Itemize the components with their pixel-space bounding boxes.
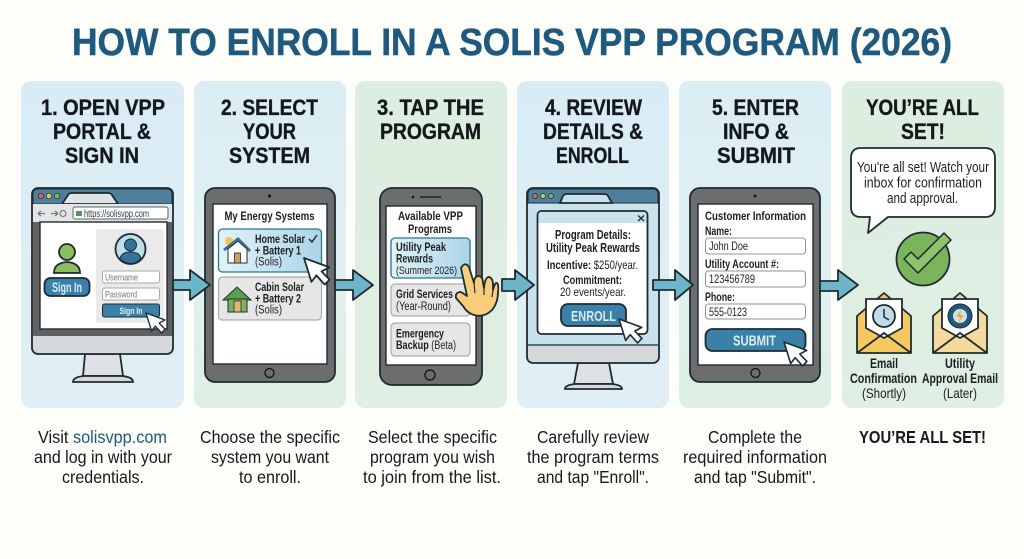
card: home solar: + Battery 1 [255,246,301,258]
button: submit [706,329,806,351]
heading: step 2: YOUR [243,119,296,144]
modal: program details: Incentive: $250/year. [547,258,638,272]
icon: phone with programs list: Available VPP [398,209,463,223]
panel: all set [842,81,1004,408]
heading: step 4: DETAILS & [543,119,643,144]
heading: step 3: PROGRAM [380,119,481,144]
panel: step 4 review [517,81,669,408]
label: utility approval email: (Later) [943,386,977,401]
card: grid services [391,284,470,316]
label: utility approval email [922,356,998,401]
icon: desktop monitor with login [32,188,173,382]
modal: program details: Commitment: [563,273,622,287]
card: home solar: Home Solar [255,234,305,246]
callout: watch your inbox: inbox for confirmation [864,176,982,192]
card: home solar [218,229,322,272]
heading: step 5 [712,95,799,168]
arrow: step 4 to 5 [653,270,693,300]
field: phone: 555-0123 [709,307,747,319]
card: utility peak rewards: (Summer 2026) [396,265,457,277]
icon: cursor [304,252,333,288]
caption: step 4: Carefully review [537,427,649,447]
card: utility peak rewards: Rewards [396,254,433,266]
callout: watch your inbox [851,148,995,233]
field: name: John Doe [709,241,748,253]
label: email confirmation: (Shortly) [862,386,906,401]
card: cabin solar: Cabin Solar [255,282,304,294]
card: emergency backup: Emergency [396,328,444,340]
card: home solar: (Solis) [255,256,282,268]
icon: tapping hand [456,264,498,316]
card: cabin solar [218,277,322,320]
button: submit sign in [102,304,160,317]
arrow: step 1 to 2 [173,270,210,300]
caption: step 5 [683,427,827,487]
caption: step 1: and log in with your [34,447,172,467]
icon: phone with programs list: Programs [408,222,452,236]
arrow: step 3 to 4 [502,270,534,300]
heading: step 1: PORTAL & [53,119,151,144]
icon: cursor [146,309,168,335]
icon: tablet with systems list [205,188,335,382]
icon: desktop monitor with login: https://solisvpp.com [84,208,149,220]
icon: email confirmation envelope [857,293,911,353]
icon: green user [54,244,80,273]
caption: step 2: system you want [211,447,329,467]
heading: step 3 [377,95,484,144]
title: HOW TO ENROLL IN A SOLIS VPP PROGRAM (2026) [72,22,952,64]
panel: step 2 select system [194,81,346,408]
icon: tablet with customer form [690,188,820,382]
callout: watch your inbox: You're all set! Watch your [857,160,989,176]
heading: step 2 [221,95,318,168]
card: utility peak rewards: Utility Peak [396,242,446,254]
heading: step 4: ENROLL [556,143,629,168]
card: emergency backup [391,323,470,356]
caption: step 5: Complete the [708,427,802,447]
field: phone [706,304,806,319]
label: utility approval email: Utility [945,356,975,371]
button: sign in [44,278,90,296]
button: submit: SUBMIT [733,334,776,350]
button: submit sign in: Sign In [120,306,142,316]
modal: program details [538,211,648,334]
caption: step 2 [200,427,340,487]
label: email confirmation: Email [870,356,898,371]
heading: step 4: 4. REVIEW [545,95,643,120]
caption: step 3 [363,427,501,487]
icon: phone with programs list [380,188,498,385]
heading: step 5: INFO & [723,119,789,144]
field: account [706,271,806,287]
icon: cursor [784,337,810,369]
card: grid services: Grid Services [396,289,453,301]
caption: step 4: and tap "Enroll". [537,467,649,487]
panel: step 1 open portal [21,81,184,408]
modal: program details: 20 events/year. [560,285,626,299]
card: cabin solar: + Battery 2 [255,294,301,306]
label: email confirmation: Confirmation [850,371,917,386]
field: password [102,288,160,300]
caption: step 4: the program terms [527,447,659,467]
icon: tablet with customer form: Customer Information [705,211,806,223]
icon: tablet with customer form: Phone: [705,292,735,304]
caption: step 5: and tap "Submit". [694,467,816,487]
heading: all set: SET! [901,119,945,144]
card: cabin solar: (Solis) [255,304,282,316]
heading: step 1: SIGN IN [65,143,139,168]
field: name [706,238,806,254]
heading: step 1 [41,95,165,168]
heading: step 3: 3. TAP THE [377,95,484,120]
caption: step 1: credentials. [62,467,144,487]
arrow: step 2 to 3 [335,270,373,300]
caption: step 4 [527,427,659,487]
field: username: Username [105,272,138,284]
card: grid services: (Year-Round) [396,301,451,313]
heading: all set [866,95,979,144]
field: password: Password [105,290,137,300]
heading: step 2: SYSTEM [229,143,310,168]
label: email confirmation [850,356,917,401]
icon: cursor [619,314,645,346]
callout: watch your inbox: and approval. [887,191,958,207]
card: emergency backup: Backup (Beta) [396,340,456,352]
panel: step 3 tap program [355,81,507,408]
arrow: step 5 to final [820,270,858,300]
caption: step 1: Visit solisvpp.com [38,427,167,447]
label: utility approval email: Approval Email [922,371,998,386]
caption: step 3: program you wish [370,447,495,467]
heading: step 1: 1. OPEN VPP [41,95,165,120]
caption: step 2: to enroll. [239,467,301,487]
icon: monitor with program details [527,188,659,389]
panel: step 5 enter info [679,81,831,408]
button: sign in: Sign In [52,279,82,295]
modal: program details: Utility Peak Rewards [546,241,640,255]
heading: step 5: SUBMIT [717,143,795,168]
caption: all set: YOU’RE ALL SET! [859,427,986,447]
button: enroll: ENROLL [571,308,616,325]
field: username [102,271,160,284]
icon: tablet with customer form: Name: [705,226,732,238]
card: utility peak rewards [391,238,470,278]
heading: step 4 [543,95,643,168]
caption: step 3: to join from the list. [363,467,501,487]
icon: avatar [116,234,146,264]
icon: tablet with systems list: My Energy Systems [224,211,314,223]
heading: all set: YOU’RE ALL [866,95,979,120]
field: account: 123456789 [709,274,755,286]
icon: green check [896,232,951,286]
heading: step 5: 5. ENTER [712,95,799,120]
caption: step 2: Choose the specific [200,427,340,447]
modal: program details: Program Details: [555,228,631,242]
icon: tablet with customer form: Utility Account #: [705,259,779,271]
heading: step 2: 2. SELECT [221,95,318,120]
caption: step 3: Select the specific [368,427,497,447]
caption: step 1 [34,427,172,487]
icon: utility approval envelope [933,293,987,353]
caption: step 5: required information [683,447,827,467]
